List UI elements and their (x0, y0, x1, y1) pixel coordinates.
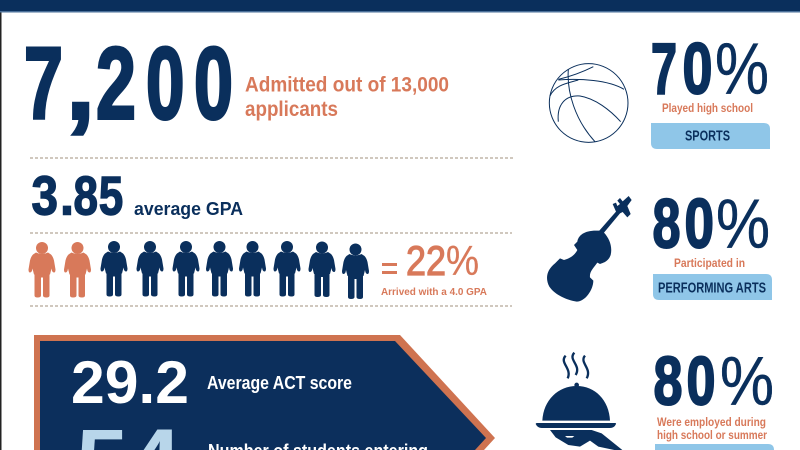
stat: 7,200 admitted: Admitted out of 13,000 (245, 74, 449, 96)
left edge line (0, 0, 2, 450)
stat: 80% employed: high school or summer (657, 428, 767, 442)
stat: 7,200 admitted: 2 (96, 26, 136, 140)
stat: 7,200 admitted: 7 (24, 26, 63, 140)
stat: 3.85 average GPA: 8 (74, 165, 98, 227)
stat: 22% arrived with 4.0 GPA: Arrived with a 4.0 GPA (381, 286, 487, 298)
stat: 70% sports: Played high school (662, 103, 753, 115)
stat: 54 students (76, 411, 428, 450)
stat: 29.2 ACT: Average ACT score (207, 372, 352, 393)
stat: 80% employed: 0 (686, 343, 716, 420)
stat: 70% sports (651, 30, 770, 149)
stat: 80% employed: Were employed during (657, 415, 766, 429)
stat: 22% arrived with 4.0 GPA: % (446, 237, 479, 284)
stat: 22% arrived with 4.0 GPA (381, 237, 487, 298)
stat: 80% employed: % (720, 343, 774, 420)
stat: 7,200 admitted: 0 (146, 26, 184, 140)
top banner (0, 0, 800, 12)
stat: 80% performing arts: 0 (684, 185, 714, 263)
stat: 7,200 admitted: , (66, 26, 94, 140)
stat: 3.85 average GPA (32, 165, 243, 227)
stat: 22% arrived with 4.0 GPA: 2 (406, 237, 426, 284)
panel: arrow with ACT stats (34, 335, 495, 450)
stat: 29.2 ACT (71, 349, 352, 416)
stat: 80% performing arts: 8 (652, 185, 680, 263)
stat: 70% sports: 0 (682, 30, 712, 110)
stat: 7,200 admitted: applicants (245, 98, 338, 121)
people icon row (28, 241, 369, 299)
stat: 70% sports: SPORTS (685, 128, 730, 144)
stat: 70% sports: % (715, 30, 769, 110)
stat: 22% arrived with 4.0 GPA: 2 (426, 237, 446, 284)
stat: 70% sports: 7 (651, 30, 677, 110)
stat: 80% employed (654, 343, 774, 450)
stat: 7,200 admitted: 0 (194, 26, 233, 140)
icon: serving cloche with steam (536, 353, 622, 450)
stat: 3.85 average GPA: average GPA (134, 199, 243, 219)
stat: 29.2 ACT: 29.2 (71, 349, 189, 416)
stat: 80% performing arts (652, 185, 772, 300)
stat: 3.85 average GPA: 3 (32, 165, 58, 227)
stat: 80% performing arts: Participated in (674, 258, 745, 270)
stat: 3.85 average GPA: . (60, 165, 74, 227)
stat: 7,200 admitted (24, 26, 449, 140)
icon: basketball (549, 64, 628, 142)
stat: 80% performing arts: % (716, 185, 770, 263)
stat: 80% performing arts: PERFORMING ARTS (658, 280, 766, 296)
stat: 80% employed: 8 (654, 343, 682, 420)
stat: 3.85 average GPA: 5 (99, 165, 123, 227)
icon: violin (547, 196, 632, 302)
